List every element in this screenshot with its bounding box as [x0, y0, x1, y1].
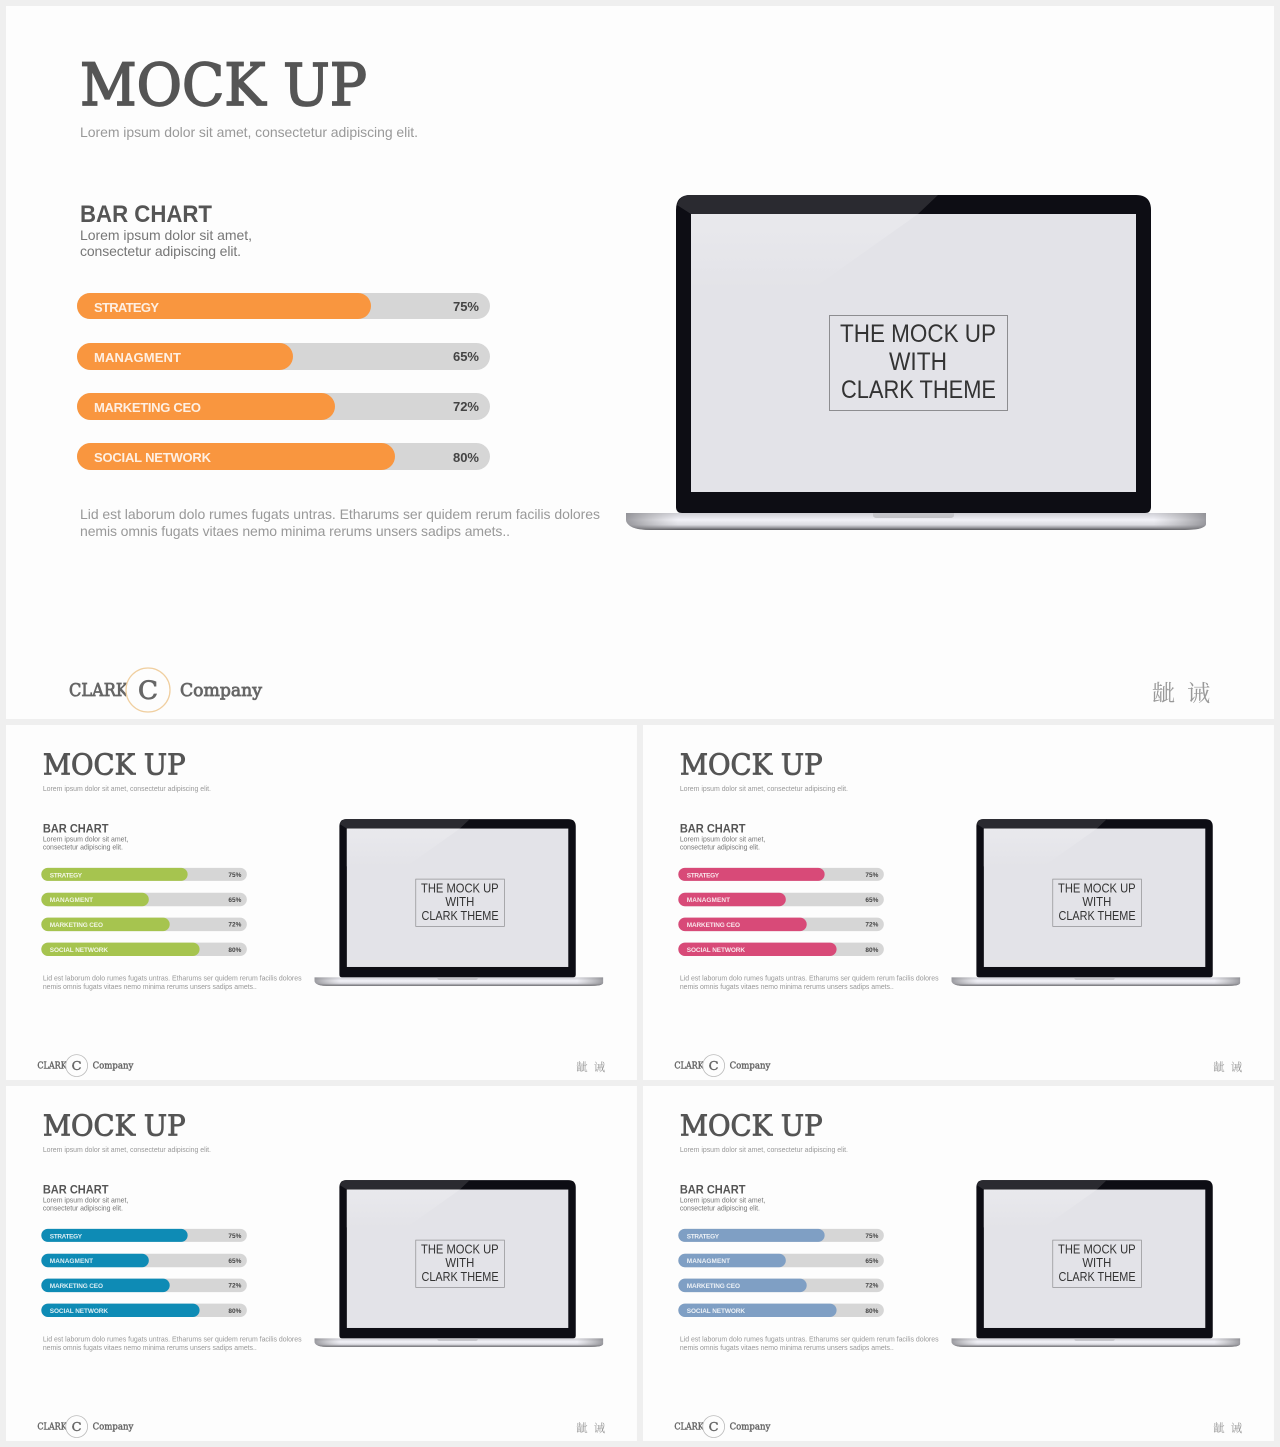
title: MOCK UP [43, 747, 186, 781]
laptop mockup: CLARK THEME [1058, 1270, 1136, 1284]
bar chart: SOCIAL NETWORK [50, 1308, 108, 1315]
company logo: Company [93, 1062, 134, 1072]
bar chart: 65% [865, 897, 879, 904]
paragraph: Lid est laborum dolo rumes fugats untras. Etharums ser quidem rerum facilis dolores [680, 975, 939, 982]
company logo: C [72, 1419, 82, 1434]
chart description: Lorem ipsum dolor sit amet, [43, 1198, 128, 1205]
subtitle: Lorem ipsum dolor sit amet, consectetur adipiscing elit. [80, 124, 418, 140]
company logo: CLARK [674, 1062, 704, 1072]
laptop mockup: THE MOCK UP [1058, 1242, 1136, 1256]
company logo: Company [180, 680, 263, 701]
bar chart: 75% [865, 1233, 879, 1240]
company logo [37, 1416, 134, 1438]
company logo: Company [93, 1423, 134, 1433]
bar: marketing ceo 72%: MARKETING CEO [94, 400, 201, 415]
footer characters: 龇 诫 [1152, 681, 1210, 706]
bar chart: 80% [865, 1308, 879, 1315]
bar chart: 72% [865, 922, 879, 929]
bar chart: 65% [228, 1258, 242, 1265]
paragraph: Lid est laborum dolo rumes fugats untras. Etharums ser quidem rerum facilis dolores [43, 1336, 302, 1343]
chart heading: BAR CHART [43, 1183, 109, 1197]
company logo: C [709, 1058, 719, 1073]
company logo [37, 1055, 134, 1077]
subtitle: Lorem ipsum dolor sit amet, consectetur adipiscing elit. [680, 1147, 848, 1154]
company logo: Company [730, 1423, 771, 1433]
bar: marketing ceo 72%: 72% [453, 399, 479, 414]
screen caption: CLARK THEME [841, 376, 996, 404]
company logo: C [709, 1419, 719, 1434]
laptop mockup [315, 819, 603, 986]
slide: blue variant [6, 1086, 637, 1441]
company logo [674, 1055, 771, 1077]
footer characters: 龇 诫 [576, 1060, 606, 1074]
paragraph: Lid est laborum dolo rumes fugats untras. Etharums ser quidem rerum facilis dolores [680, 1336, 939, 1343]
title: MOCK UP [680, 747, 823, 781]
slide: slate blue variant [643, 1086, 1274, 1441]
bar chart: MANAGMENT [687, 897, 730, 904]
paragraph: Lid est laborum dolo rumes fugats untras. Etharums ser quidem rerum facilis dolores [43, 975, 302, 982]
bar chart: MARKETING CEO [50, 1283, 103, 1290]
laptop mockup [952, 819, 1240, 986]
laptop mockup: THE MOCK UP [421, 1242, 499, 1256]
laptop mockup: CLARK THEME [1058, 909, 1136, 923]
slide: pink variant [643, 725, 1274, 1080]
bar chart: MANAGMENT [50, 1258, 93, 1265]
slide: green variant [6, 725, 637, 1080]
laptop mockup: CLARK THEME [421, 1270, 499, 1284]
bar chart: 80% [228, 947, 242, 954]
bar chart: MANAGMENT [50, 897, 93, 904]
paragraph: Lid est laborum dolo rumes fugats untras. Etharums ser quidem rerum facilis dolores [80, 506, 600, 522]
chart description: Lorem ipsum dolor sit amet, [43, 837, 128, 844]
bar chart: STRATEGY [50, 872, 83, 879]
paragraph [80, 506, 600, 539]
chart description [43, 837, 128, 851]
company logo: C [138, 676, 158, 705]
laptop mockup: WITH [445, 1256, 474, 1270]
chart heading: BAR CHART [680, 822, 746, 836]
laptop mockup [952, 1180, 1240, 1347]
title: MOCK UP [43, 1108, 186, 1142]
screen caption [830, 316, 1008, 410]
laptop mockup: THE MOCK UP [1058, 881, 1136, 895]
bar: managment 65%: 65% [453, 349, 479, 364]
laptop mockup [626, 195, 1206, 530]
chart description [43, 1198, 128, 1212]
subtitle: Lorem ipsum dolor sit amet, consectetur adipiscing elit. [43, 786, 211, 793]
chart description [680, 837, 765, 851]
company logo: CLARK [37, 1423, 67, 1433]
chart description: consectetur adipiscing elit. [680, 844, 760, 851]
subtitle: Lorem ipsum dolor sit amet, consectetur adipiscing elit. [43, 1147, 211, 1154]
bar: managment 65%: MANAGMENT [94, 350, 181, 365]
company logo: CLARK [674, 1423, 704, 1433]
paragraph [43, 1336, 302, 1352]
screen caption: WITH [889, 348, 947, 376]
bar chart [678, 1229, 884, 1317]
chart description: consectetur adipiscing elit. [80, 243, 241, 259]
bar chart: SOCIAL NETWORK [50, 947, 108, 954]
laptop mockup: WITH [445, 895, 474, 909]
chart description: Lorem ipsum dolor sit amet, [680, 1198, 765, 1205]
bar chart: 65% [865, 1258, 879, 1265]
bar: social network 80%: SOCIAL NETWORK [94, 450, 212, 465]
screen caption: THE MOCK UP [840, 320, 996, 348]
bar chart: SOCIAL NETWORK [687, 1308, 745, 1315]
bar chart [678, 868, 884, 956]
bar chart: MANAGMENT [687, 1258, 730, 1265]
bar chart: STRATEGY [687, 1233, 720, 1240]
paragraph: nemis omnis fugats vitaes nemo minima rerums unsers sadips amets.. [680, 1345, 894, 1352]
subtitle: Lorem ipsum dolor sit amet, consectetur adipiscing elit. [680, 786, 848, 793]
footer characters: 龇 诫 [1213, 1060, 1243, 1074]
bar: strategy 75%: STRATEGY [94, 300, 159, 315]
company logo: CLARK [37, 1062, 67, 1072]
bar chart: 75% [228, 872, 242, 879]
title: MOCK UP [680, 1108, 823, 1142]
company logo: Company [730, 1062, 771, 1072]
bar chart: 72% [228, 922, 242, 929]
bar chart: 75% [865, 872, 879, 879]
chart heading: BAR CHART [43, 822, 109, 836]
company logo [674, 1416, 771, 1438]
bar: strategy 75%: 75% [453, 299, 479, 314]
bar chart [77, 293, 490, 470]
chart description: consectetur adipiscing elit. [43, 844, 123, 851]
bar chart: MARKETING CEO [50, 922, 103, 929]
bar chart: 65% [228, 897, 242, 904]
paragraph: nemis omnis fugats vitaes nemo minima rerums unsers sadips amets.. [43, 984, 257, 991]
bar: marketing ceo 72% [77, 393, 490, 420]
bar: strategy 75% [77, 293, 490, 319]
laptop mockup: THE MOCK UP [421, 881, 499, 895]
bar chart [41, 868, 247, 956]
company logo [69, 668, 263, 712]
bar chart: SOCIAL NETWORK [687, 947, 745, 954]
laptop mockup: WITH [1082, 1256, 1111, 1270]
paragraph: nemis omnis fugats vitaes nemo minima rerums unsers sadips amets.. [80, 523, 510, 539]
chart description [680, 1198, 765, 1212]
chart description: consectetur adipiscing elit. [43, 1205, 123, 1212]
bar chart: 72% [865, 1283, 879, 1290]
paragraph: nemis omnis fugats vitaes nemo minima rerums unsers sadips amets.. [43, 1345, 257, 1352]
bar: social network 80% [77, 443, 490, 470]
laptop mockup [315, 1180, 603, 1347]
bar chart: MARKETING CEO [687, 1283, 740, 1290]
paragraph [680, 1336, 939, 1352]
footer characters: 龇 诫 [1213, 1421, 1243, 1435]
laptop mockup: WITH [1082, 895, 1111, 909]
chart heading: BAR CHART [680, 1183, 746, 1197]
chart heading: BAR CHART [80, 201, 212, 228]
footer characters: 龇 诫 [576, 1421, 606, 1435]
chart description [80, 227, 252, 259]
bar chart: 75% [228, 1233, 242, 1240]
paragraph [680, 975, 939, 991]
bar chart: MARKETING CEO [687, 922, 740, 929]
paragraph: nemis omnis fugats vitaes nemo minima rerums unsers sadips amets.. [680, 984, 894, 991]
paragraph [43, 975, 302, 991]
chart description: consectetur adipiscing elit. [680, 1205, 760, 1212]
bar chart [41, 1229, 247, 1317]
bar chart: 80% [865, 947, 879, 954]
chart description: Lorem ipsum dolor sit amet, [80, 227, 252, 243]
laptop mockup: CLARK THEME [421, 909, 499, 923]
bar chart: 72% [228, 1283, 242, 1290]
bar chart: STRATEGY [50, 1233, 83, 1240]
bar chart: 80% [228, 1308, 242, 1315]
bar chart: STRATEGY [687, 872, 720, 879]
bar: social network 80%: 80% [453, 450, 479, 465]
slide: orange main [6, 6, 1274, 719]
chart description: Lorem ipsum dolor sit amet, [680, 837, 765, 844]
company logo: CLARK [69, 680, 128, 701]
company logo: C [72, 1058, 82, 1073]
bar: managment 65% [77, 343, 490, 370]
title: MOCK UP [80, 51, 367, 119]
